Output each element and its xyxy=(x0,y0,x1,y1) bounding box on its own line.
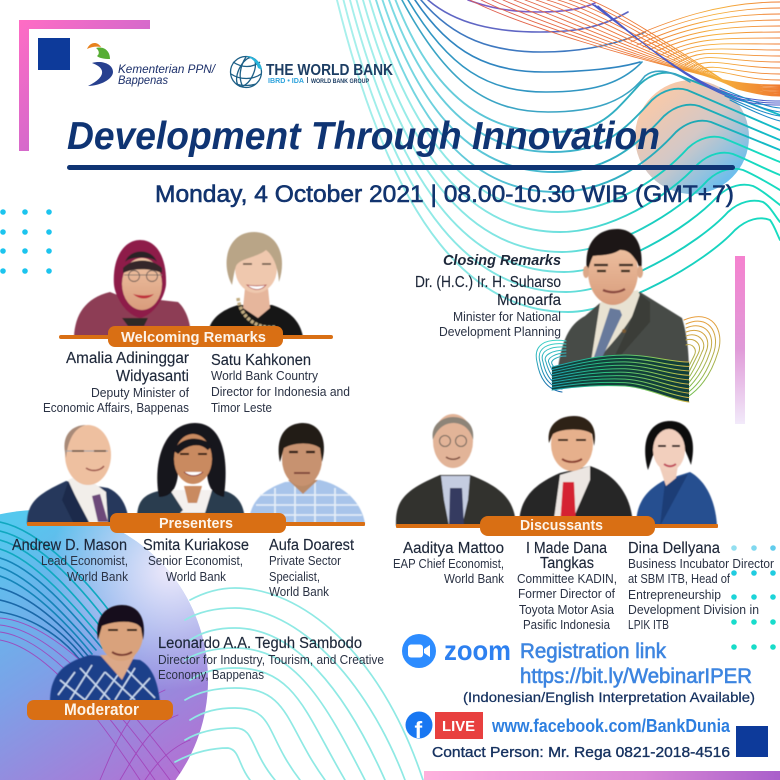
facebook url: www.facebook.com/BankDunia xyxy=(491,716,731,736)
speaker: Amalia xyxy=(43,350,190,415)
speaker: Amalia: Economic Affairs, Bappenas xyxy=(43,401,189,415)
logo: The World Bank xyxy=(230,55,393,89)
band: presenters xyxy=(27,513,365,533)
speaker: Smita: World Bank xyxy=(166,570,227,584)
speaker text: Dr. (H.C.) Ir. H. Suharso xyxy=(415,274,561,291)
background circle bottom left xyxy=(0,510,208,780)
panel: presenters xyxy=(12,423,365,599)
logo: Kementerian PPN / Bappenas xyxy=(87,43,217,87)
blue square top left xyxy=(38,38,70,70)
portrait: Satu Kahkonen xyxy=(207,232,303,337)
speaker: I Made xyxy=(517,540,617,632)
panel: closing remarks xyxy=(415,229,720,402)
icon: facebook xyxy=(406,712,432,743)
speaker: Andrew xyxy=(12,537,129,584)
speaker: Andrew: Lead Economist, xyxy=(41,554,128,568)
speaker: Leonardo: Economy, Bappenas xyxy=(158,668,264,682)
speaker text: Minister for National xyxy=(453,310,561,324)
portrait: Amalia Adininggar Widyasanti xyxy=(74,240,191,337)
portrait: Leonardo Sambodo xyxy=(50,605,160,702)
speaker: I Made: Tangkas xyxy=(540,555,594,572)
speaker: Aufa: World Bank xyxy=(269,585,330,599)
panel: moderator xyxy=(27,605,384,720)
speaker: I Made: Committee KADIN, xyxy=(517,572,617,586)
panel: welcoming remarks xyxy=(43,232,350,415)
blue square bottom right xyxy=(736,726,768,757)
corner bracket top left xyxy=(19,20,150,151)
speaker: I Made: I Made Dana xyxy=(526,540,607,557)
live badge: LIVE xyxy=(442,718,475,735)
speaker: Dina: Business Incubator Director xyxy=(628,557,774,571)
band: discussants xyxy=(396,516,718,536)
ribbon graphic xyxy=(536,317,720,402)
live badge xyxy=(435,712,483,739)
contact person: Contact Person: Mr. Rega 0821-2018-4516 xyxy=(432,744,730,761)
speaker: Leonardo: Director for Industry, Tourism, and Creative xyxy=(158,653,384,667)
band: welcoming remarks xyxy=(59,326,333,347)
speaker: Satu: World Bank Country xyxy=(211,369,319,383)
logo: The World Bank: THE WORLD BANK xyxy=(266,62,393,79)
title: Development Through Innovation xyxy=(67,115,660,158)
speaker: Aufa: Specialist, xyxy=(269,570,320,584)
speaker: Dina: at SBM ITB, Head of xyxy=(628,572,730,586)
speaker: Dina xyxy=(628,540,774,632)
speaker: Andrew: Andrew D. Mason xyxy=(12,537,127,554)
logo: Kementerian PPN / Bappenas: Kementerian PPN/ xyxy=(118,62,217,76)
portrait: Smita Kuriakose xyxy=(137,423,245,524)
panel: registration xyxy=(402,634,755,705)
speaker: Amalia: Deputy Minister of xyxy=(91,386,190,400)
speaker: Aufa: Private Sector xyxy=(269,554,341,568)
speaker: Amalia: Amalia Adininggar xyxy=(66,350,189,367)
speaker: Aufa xyxy=(269,537,355,599)
portrait: Aaditya Mattoo xyxy=(396,414,516,526)
speaker: Satu: Satu Kahkonen xyxy=(211,352,311,369)
speaker: Smita: Smita Kuriakose xyxy=(143,537,249,554)
speaker text xyxy=(415,274,561,339)
heading: closing remarks: Closing Remarks xyxy=(443,252,561,269)
zoom wordmark: zoom xyxy=(444,635,511,666)
speaker: Aaditya: EAP Chief Economist, xyxy=(393,557,504,571)
dots left xyxy=(0,209,52,274)
speaker: Dina: LPIK ITB xyxy=(628,618,669,632)
speaker text: Monoarfa xyxy=(497,292,561,309)
panel: discussants xyxy=(393,414,774,632)
portrait: Dina Dellyana xyxy=(636,421,717,526)
url: https://bit.ly/WebinarIPER xyxy=(520,665,752,688)
logo: The World Bank: WORLD BANK GROUP xyxy=(311,78,370,85)
portrait: Andrew D. Mason xyxy=(27,425,129,524)
accent circle top right xyxy=(635,80,749,194)
speaker: Satu: Timor Leste xyxy=(211,401,272,415)
icon: zoom xyxy=(402,634,436,668)
speaker: Dina: Entrepreneurship xyxy=(628,588,721,602)
speaker: Amalia: Widyasanti xyxy=(116,368,189,385)
speaker: Dina: Development Division in xyxy=(628,603,759,617)
speaker: Dina: Dina Dellyana xyxy=(628,540,720,557)
portrait: I Made Dana Tangkas xyxy=(519,416,633,526)
band: welcoming remarks: Welcoming Remarks xyxy=(121,329,266,346)
logo: The World Bank: IBRD • IDA xyxy=(268,78,304,85)
speaker: Aaditya xyxy=(393,540,505,586)
band: moderator: Moderator xyxy=(64,701,140,719)
band: moderator xyxy=(27,700,173,720)
speaker: I Made: Toyota Motor Asia xyxy=(519,603,614,617)
portrait: Suharso Monoarfa xyxy=(553,229,689,380)
speaker: Leonardo: Leonardo A.A. Teguh Sambodo xyxy=(158,635,362,652)
interpretation note: (Indonesian/English Interpretation Available) xyxy=(463,689,755,705)
speaker: I Made: Pasific Indonesia xyxy=(523,618,610,632)
panel: facebook live and contact xyxy=(406,712,731,761)
speaker: Smita xyxy=(143,537,249,584)
speaker: Aufa: Aufa Doarest xyxy=(269,537,355,554)
speaker: Leonardo xyxy=(158,635,384,682)
date and time: Monday, 4 October 2021 | 08.00-10.30 WIB (GMT+7) xyxy=(155,181,734,208)
dots right xyxy=(731,545,776,650)
speaker: I Made: Former Director of xyxy=(518,587,616,601)
speaker: Andrew: World Bank xyxy=(67,570,129,584)
logo: Kementerian PPN / Bappenas: Bappenas xyxy=(118,73,168,87)
accent bar right xyxy=(735,256,745,424)
band: presenters: Presenters xyxy=(159,515,233,532)
speaker: Smita: Senior Economist, xyxy=(148,554,243,568)
band: discussants: Discussants xyxy=(520,517,603,534)
title rule xyxy=(67,165,735,170)
speaker: Satu xyxy=(211,352,350,415)
speaker: Satu: Director for Indonesia and xyxy=(211,385,350,399)
accent bar bottom xyxy=(424,771,780,780)
registration link: Registration link xyxy=(520,640,666,663)
speaker text: Development Planning xyxy=(439,325,561,339)
speaker: Aaditya: World Bank xyxy=(444,572,505,586)
speaker: Aaditya: Aaditya Mattoo xyxy=(403,540,504,557)
icon: facebook: f xyxy=(414,717,422,743)
portrait: Aufa Doarest xyxy=(249,423,365,524)
